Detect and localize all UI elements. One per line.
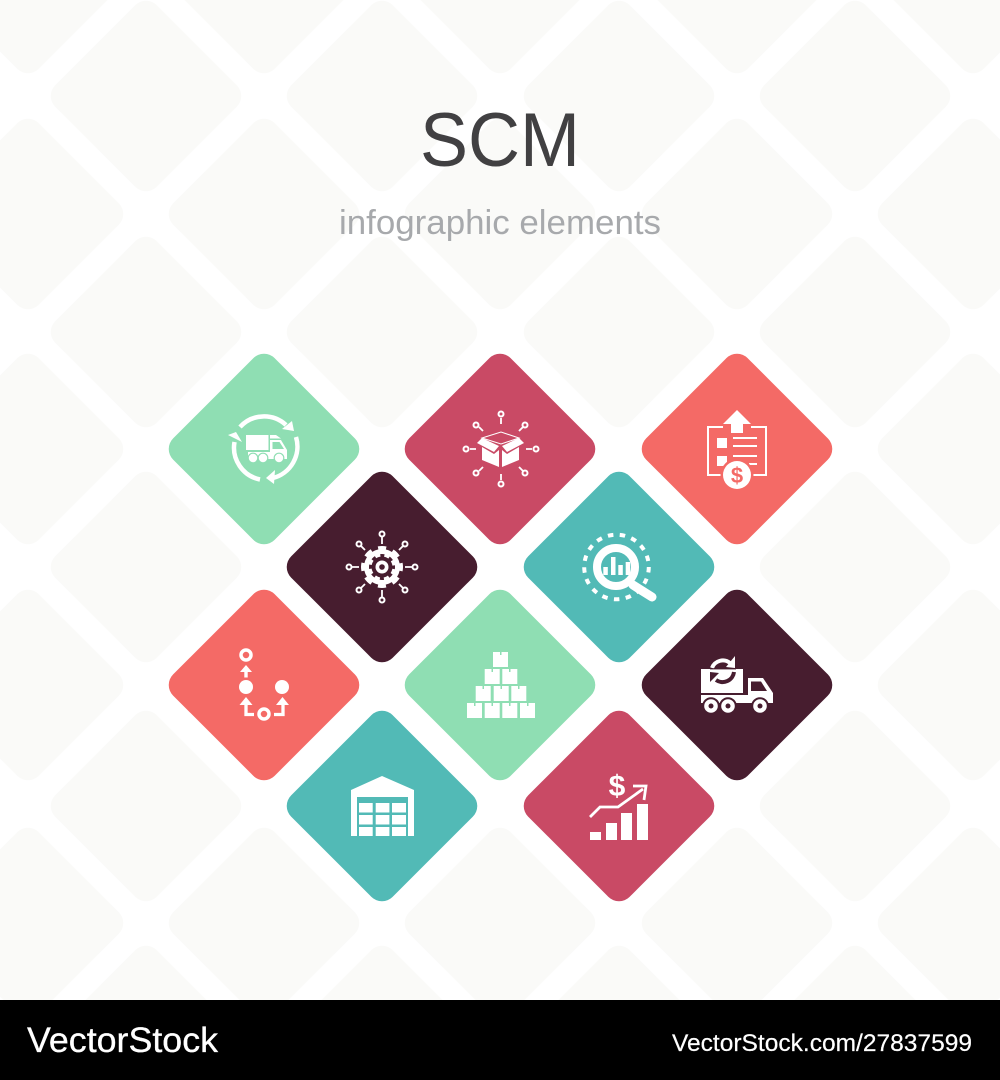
footer bar	[0, 1000, 1000, 1080]
icon: warehouse with shutter door	[351, 776, 414, 836]
icon: gear with connected nodes	[346, 532, 418, 602]
panel: warehouse	[281, 705, 483, 907]
panel: inventory stack	[399, 584, 601, 786]
icon: pyramid of boxes	[467, 652, 535, 718]
panel: revenue growth	[518, 705, 720, 907]
panel: supply network gear	[281, 466, 483, 668]
panel: box distribution	[399, 348, 601, 550]
icon: growth bars with dollar and arrow	[590, 770, 648, 840]
subtitle: infographic elements	[339, 204, 661, 242]
panel: cost document	[636, 348, 838, 550]
panel: process flow	[163, 584, 365, 786]
footer image id: VectorStock.com/27837599	[672, 1030, 972, 1057]
icon: truck with refresh arrows	[701, 656, 773, 714]
icon: document with up arrow and dollar coin: $	[731, 463, 743, 488]
icon: open box with nodes	[464, 412, 538, 486]
icon: magnifier over bar chart	[584, 535, 652, 599]
panel: data analysis	[518, 466, 720, 668]
panel: truck cycle	[163, 348, 365, 550]
icon: nodes and arrows flow	[239, 650, 289, 719]
footer brand: VectorStock	[27, 1021, 219, 1060]
icon: document with up arrow and dollar coin	[708, 410, 766, 492]
title: SCM	[420, 98, 580, 183]
icon: truck with circular arrows	[228, 416, 297, 484]
panel: delivery truck	[636, 584, 838, 786]
icon: growth bars with dollar and arrow: $	[609, 770, 626, 803]
